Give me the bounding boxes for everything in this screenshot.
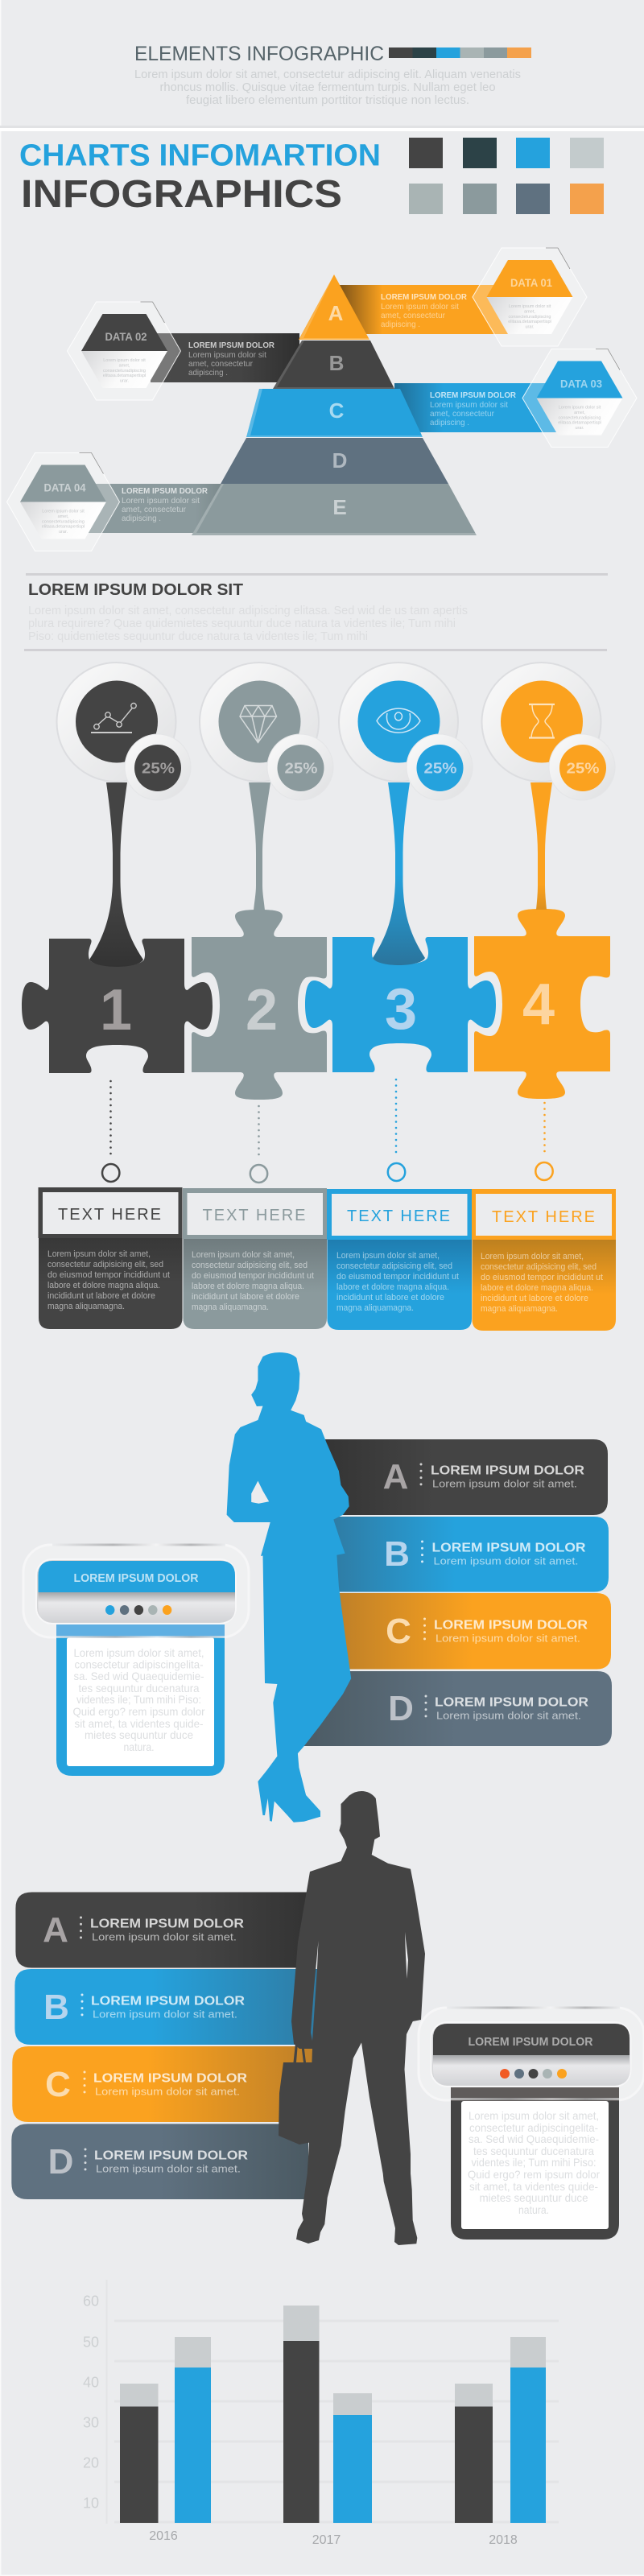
- group 2018: [455, 2337, 546, 2547]
- intro paragraph: feugiat libero elementum porttitor tristique non lectus.: [186, 93, 469, 107]
- panel header: LOREM IPSUM DOLOR: [469, 2036, 593, 2049]
- panel body: sa. Sed wid Quaequidemie-: [74, 1670, 204, 1682]
- pyramid level B: B: [329, 351, 344, 375]
- stem 2: [249, 782, 270, 910]
- hexagon: data 03: urar.: [575, 426, 584, 431]
- text card 4: consectetur adipisicing elit, sed: [481, 1262, 597, 1272]
- panel header: [431, 2022, 631, 2087]
- ribbon: orange A: amet, consectetur: [381, 311, 445, 320]
- panel body: tes sequuntur ducenatura: [473, 2145, 594, 2157]
- colour strip: [389, 47, 531, 58]
- text card 4: do eiusmod tempor incididunt ut: [481, 1273, 603, 1282]
- intro paragraph: Lorem ipsum dolor sit amet, consectetur adipiscing elit. Aliquam venenatis: [134, 68, 521, 81]
- y axis labels: 40: [83, 2375, 99, 2391]
- dark info panel: [419, 2006, 644, 2240]
- hexagon: data 04: DATA 04: [43, 481, 86, 494]
- hexagon: data 03: DATA 03: [560, 377, 602, 390]
- text card 1: do eiusmod tempor incididunt ut: [47, 1270, 170, 1280]
- y axis labels: 60: [83, 2293, 99, 2309]
- text card 1: labore et dolore magna aliqua.: [47, 1281, 160, 1290]
- colour dots: [105, 1605, 171, 1615]
- bar B: [330, 1517, 609, 1592]
- text card 3: labore et dolore magna aliqua.: [336, 1282, 449, 1292]
- connector 3: [388, 1080, 405, 1181]
- icon: eye: [377, 708, 420, 733]
- text card 4: labore et dolore magna aliqua.: [481, 1283, 593, 1293]
- group 2016: 2016: [149, 2529, 178, 2543]
- ribbon: dark B: Lorem ipsum dolor sit: [188, 350, 266, 360]
- title: ELEMENTS INFOGRAPHIC: [134, 43, 384, 65]
- percent bubble: 25%: [567, 760, 599, 776]
- y axis labels: 20: [83, 2455, 99, 2471]
- main circle: [200, 663, 319, 782]
- bar chart: [83, 2280, 559, 2547]
- ribbon: blue C: LOREM IPSUM DOLOR: [430, 391, 517, 400]
- colour swatches: [409, 138, 604, 214]
- y axis labels: [83, 2293, 99, 2512]
- icon: diamond: [240, 705, 277, 742]
- hexagon: data 01: elitasa.detamapertispl: [508, 320, 551, 324]
- bar B: Lorem ipsum dolor sit amet.: [433, 1555, 578, 1567]
- text card 2: labore et dolore magna aliqua.: [192, 1282, 304, 1291]
- pyramid level D: D: [332, 448, 347, 473]
- ribbon: orange A: LOREM IPSUM DOLOR: [381, 293, 468, 302]
- panel header: [36, 1559, 236, 1624]
- percent bubble: 25%: [285, 760, 317, 776]
- percent bubble: [267, 734, 333, 800]
- bar B: LOREM IPSUM DOLOR: [431, 1541, 586, 1555]
- woman silhouette: [227, 1352, 351, 1823]
- section paragraph: Piso: quidemietes sequuntur duce natura ta videntes ile; Tum mihi: [28, 630, 368, 643]
- text card 2: do eiusmod tempor incididunt ut: [192, 1271, 314, 1281]
- hexagon: data 04: Lorem ipsum dolor sit: [42, 509, 85, 514]
- ribbon: blue C: adipiscing .: [430, 418, 469, 427]
- text card 1: incididunt ut labore et dolore: [47, 1291, 155, 1301]
- bar D: [299, 1671, 612, 1746]
- hexagon: data 01: consecteturadipiscing: [509, 315, 551, 320]
- bar A: A: [43, 1910, 68, 1950]
- connector 2: [250, 1106, 267, 1183]
- text card 2: incididunt ut labore et dolore: [192, 1292, 299, 1302]
- hexagon: data 02: [68, 302, 180, 400]
- text card 2: TEXT HERE: [203, 1207, 306, 1224]
- text card 4: magna aliquamagna.: [481, 1304, 558, 1314]
- text card 3: TEXT HERE: [347, 1208, 450, 1225]
- colour dots: [500, 2069, 567, 2079]
- text card 2: consectetur adipisicing elit, sed: [192, 1261, 308, 1270]
- text card 2: [183, 1188, 327, 1329]
- badge 4: hourglass: [481, 663, 615, 800]
- panel body: sa. Sed wid Quaequidemie-: [469, 2132, 599, 2145]
- hexagon: data 02: Lorem ipsum dolor sit: [103, 358, 146, 363]
- pyramid level C: C: [329, 398, 345, 423]
- panel body: sit amet, ta videntes quide-: [74, 1717, 204, 1730]
- pyramid level A: A: [328, 301, 344, 325]
- ribbon: orange A: adipiscing .: [381, 320, 420, 329]
- text card 4: TEXT HERE: [492, 1208, 595, 1226]
- text card 1: magna aliquamagna.: [47, 1302, 125, 1311]
- pyramid level C: [246, 389, 423, 437]
- bar D: [11, 2124, 308, 2199]
- puzzle piece 2: [192, 910, 327, 1100]
- puzzle piece 4: [474, 909, 610, 1099]
- hexagon: data 03: [522, 349, 637, 448]
- hexagon: data 01: DATA 01: [510, 276, 552, 289]
- badge 1: chart: [56, 663, 191, 800]
- panel body: tes sequuntur ducenatura: [79, 1682, 200, 1695]
- main circle: [339, 663, 458, 782]
- text card 2: Lorem ipsum dolor sit amet,: [192, 1250, 295, 1260]
- bar B: [14, 1969, 318, 2045]
- hexagon: data 03: elitasa.detamapertispl: [558, 420, 601, 425]
- bar A: Lorem ipsum dolor sit amet.: [432, 1478, 577, 1489]
- hexagon: data 02: urar.: [120, 378, 129, 383]
- bar C: C: [45, 2065, 71, 2104]
- woman side list: [299, 1439, 612, 1746]
- panel header: LOREM IPSUM DOLOR: [74, 1572, 199, 1585]
- panel body: mietes sequuntur duce: [480, 2191, 588, 2204]
- text card 3: do eiusmod tempor incididunt ut: [336, 1272, 459, 1282]
- text card 1: consectetur adipisicing elit, sed: [47, 1260, 163, 1269]
- text card 4: Lorem ipsum dolor sit amet,: [481, 1252, 584, 1261]
- text card 2: magna aliquamagna.: [192, 1302, 269, 1312]
- connector 4: [535, 1103, 553, 1180]
- ribbon: dark B: adipiscing .: [188, 368, 228, 378]
- ribbon: orange A: [340, 285, 510, 334]
- panel body: consectetur adipiscingelita-: [74, 1658, 204, 1671]
- ribbon: blue C: Lorem ipsum dolor sit: [430, 400, 508, 410]
- panel body: natura.: [518, 2203, 549, 2216]
- bar B: B: [384, 1534, 410, 1574]
- percent bubble: [407, 734, 473, 800]
- hexagon: data 04: elitasa.detamapertispl: [42, 525, 85, 530]
- connector 1: [102, 1081, 119, 1182]
- panel body: Quid ergo? rem ipsum dolor: [72, 1705, 205, 1718]
- hexagon: data 01: [473, 248, 587, 346]
- puzzle piece 3: 3: [385, 977, 417, 1042]
- group 2016: [120, 2337, 211, 2543]
- briefcase: [279, 2043, 316, 2145]
- puzzle piece 1: 1: [100, 978, 132, 1042]
- text card 3: magna aliquamagna.: [336, 1303, 414, 1313]
- main circle: [56, 663, 175, 782]
- bar D: D: [48, 2142, 73, 2182]
- dark headline: INFOGRAPHICS: [21, 173, 342, 216]
- hexagon: data 03: consecteturadipiscing: [559, 415, 601, 420]
- bar C: LOREM IPSUM DOLOR: [93, 2072, 247, 2085]
- text card 3: incididunt ut labore et dolore: [336, 1293, 444, 1302]
- percent bubble: [125, 734, 191, 800]
- panel body: [451, 2087, 619, 2240]
- pyramid level E: [192, 484, 477, 535]
- blue headline: CHARTS INFOMARTION: [19, 138, 381, 172]
- puzzle piece 1: [22, 939, 213, 1073]
- bar C: Lorem ipsum dolor sit amet.: [95, 2085, 240, 2098]
- man silhouette with bag: [279, 1791, 425, 2245]
- glass frame: [419, 2006, 644, 2100]
- section heading and text: [28, 581, 468, 643]
- ribbon: orange A: Lorem ipsum dolor sit: [381, 302, 459, 312]
- bar D: LOREM IPSUM DOLOR: [435, 1695, 588, 1710]
- stem 1: [89, 782, 143, 967]
- text card 3: Lorem ipsum dolor sit amet,: [336, 1251, 440, 1261]
- text card 4: incididunt ut labore et dolore: [481, 1294, 588, 1303]
- ribbon: grey E: LOREM IPSUM DOLOR: [122, 487, 208, 496]
- panel body: videntes ile; Tum mihi Piso:: [76, 1693, 201, 1706]
- ribbon: dark B: [151, 333, 299, 382]
- panel body: sit amet, ta videntes quide-: [469, 2180, 598, 2193]
- percent bubble: 25%: [423, 760, 457, 776]
- text card 3: consectetur adipisicing elit, sed: [336, 1261, 452, 1271]
- header: elements infographic: [134, 43, 531, 107]
- stem 4: [530, 782, 552, 910]
- section paragraph: Lorem ipsum dolor sit amet, consectetur adipiscing elitasa. Sed wid de us tam apertis: [28, 604, 468, 617]
- bar C: [334, 1593, 611, 1670]
- panel body: Lorem ipsum dolor sit amet,: [469, 2109, 599, 2122]
- heading: charts information: [19, 138, 381, 216]
- blue info panel: [23, 1544, 249, 1776]
- ribbon: blue C: [394, 383, 558, 432]
- bar A: LOREM IPSUM DOLOR: [90, 1918, 244, 1930]
- panel body: mietes sequuntur duce: [85, 1728, 193, 1741]
- y axis labels: 30: [83, 2415, 99, 2431]
- bar D: D: [388, 1689, 414, 1728]
- hexagon: data 04: consecteturadipiscing: [42, 520, 85, 525]
- hexagon: data 02: DATA 02: [105, 330, 147, 343]
- glass frame: [23, 1544, 249, 1637]
- stem 3: [373, 782, 425, 965]
- text card 3: [327, 1189, 472, 1330]
- ribbon: grey E: adipiscing .: [122, 514, 161, 523]
- bar C: [12, 2046, 314, 2122]
- bar B: B: [43, 1988, 69, 2027]
- ribbon: dark B: amet, consectetur: [188, 359, 253, 369]
- text card 1: Lorem ipsum dolor sit amet,: [47, 1249, 151, 1259]
- bar C: Lorem ipsum dolor sit amet.: [436, 1633, 580, 1644]
- bar C: LOREM IPSUM DOLOR: [434, 1618, 588, 1633]
- pyramid level B: [273, 341, 394, 389]
- panel body: Lorem ipsum dolor sit amet,: [74, 1646, 204, 1659]
- group 2018: 2018: [489, 2533, 518, 2547]
- hexagon: data 02: consecteturadipiscing: [103, 369, 146, 374]
- bar A: LOREM IPSUM DOLOR: [431, 1463, 584, 1478]
- pyramid level E: E: [332, 495, 347, 519]
- hexagon: data 02: amet,: [119, 364, 130, 369]
- section paragraph: plura requirere? Quae quidemietes sequuntur duce natura ta videntes ile; Tum mihi: [28, 617, 456, 630]
- ribbon: dark B: LOREM IPSUM DOLOR: [188, 341, 275, 350]
- bar B: LOREM IPSUM DOLOR: [91, 1995, 245, 2008]
- ribbon: grey E: [89, 484, 222, 533]
- hexagon: data 04: urar.: [59, 530, 68, 535]
- text card 4: [472, 1189, 616, 1331]
- icon: line chart: [91, 704, 136, 733]
- ribbon: blue C: amet, consectetur: [430, 409, 494, 419]
- text card 1: TEXT HERE: [58, 1206, 161, 1224]
- bar B: Lorem ipsum dolor sit amet.: [93, 2008, 237, 2021]
- hexagon: data 01: Lorem ipsum dolor sit: [509, 304, 551, 309]
- intro paragraph: rhoncus mollis. Quisque vitae fermentum turpis. Nullam eget leo: [159, 80, 496, 94]
- bar A: A: [383, 1457, 408, 1496]
- badge 3: eye: [339, 663, 473, 800]
- percent bubble: [549, 734, 615, 800]
- panel body: videntes ile; Tum mihi Piso:: [472, 2156, 596, 2169]
- y axis labels: 50: [83, 2334, 99, 2351]
- bar D: Lorem ipsum dolor sit amet.: [96, 2162, 241, 2175]
- hexagon: data 03: amet,: [574, 411, 585, 415]
- hexagon: data 04: [6, 452, 119, 551]
- intro paragraph: [134, 68, 521, 107]
- panel body: [56, 1624, 225, 1776]
- ribbon: grey E: amet, consectetur: [122, 505, 186, 514]
- section paragraph: [28, 604, 468, 643]
- bar C: C: [386, 1612, 411, 1651]
- ribbon: grey E: Lorem ipsum dolor sit: [122, 496, 200, 506]
- panel body: consectetur adipiscingelita-: [469, 2121, 598, 2134]
- pyramid diagram: [6, 248, 637, 551]
- hexagon: data 01: amet,: [524, 309, 535, 314]
- section heading: LOREM IPSUM DOLOR SIT: [28, 581, 243, 599]
- puzzle piece 4: 4: [522, 972, 555, 1037]
- pyramid level A: [299, 275, 370, 341]
- pyramid level D: [221, 438, 448, 484]
- puzzle piece 3: [305, 937, 496, 1072]
- group 2017: 2017: [312, 2533, 341, 2547]
- hexagon: data 04: amet,: [58, 514, 69, 519]
- puzzle piece 2: 2: [246, 978, 278, 1042]
- icon: hourglass: [529, 704, 555, 737]
- hexagon: data 03: Lorem ipsum dolor sit: [559, 406, 601, 411]
- bar A: Lorem ipsum dolor sit amet.: [92, 1930, 237, 1943]
- group 2017: [283, 2306, 372, 2547]
- y axis labels: 10: [83, 2496, 99, 2512]
- badge 2: diamond: [200, 663, 333, 800]
- bar D: Lorem ipsum dolor sit amet.: [436, 1710, 581, 1721]
- panel body: natura.: [124, 1740, 155, 1753]
- text card 1: [39, 1187, 182, 1329]
- percent bubble: 25%: [142, 760, 175, 776]
- hexagon: data 01: urar.: [525, 325, 535, 330]
- bar D: LOREM IPSUM DOLOR: [94, 2149, 248, 2162]
- main circle: [481, 663, 601, 782]
- panel body: Quid ergo? rem ipsum dolor: [468, 2168, 600, 2181]
- hexagon: data 02: elitasa.detamapertispl: [103, 374, 146, 378]
- man side list: [11, 1892, 318, 2199]
- bar A: [318, 1439, 608, 1515]
- chart grid: [106, 2280, 559, 2524]
- bar A: [15, 1892, 310, 1967]
